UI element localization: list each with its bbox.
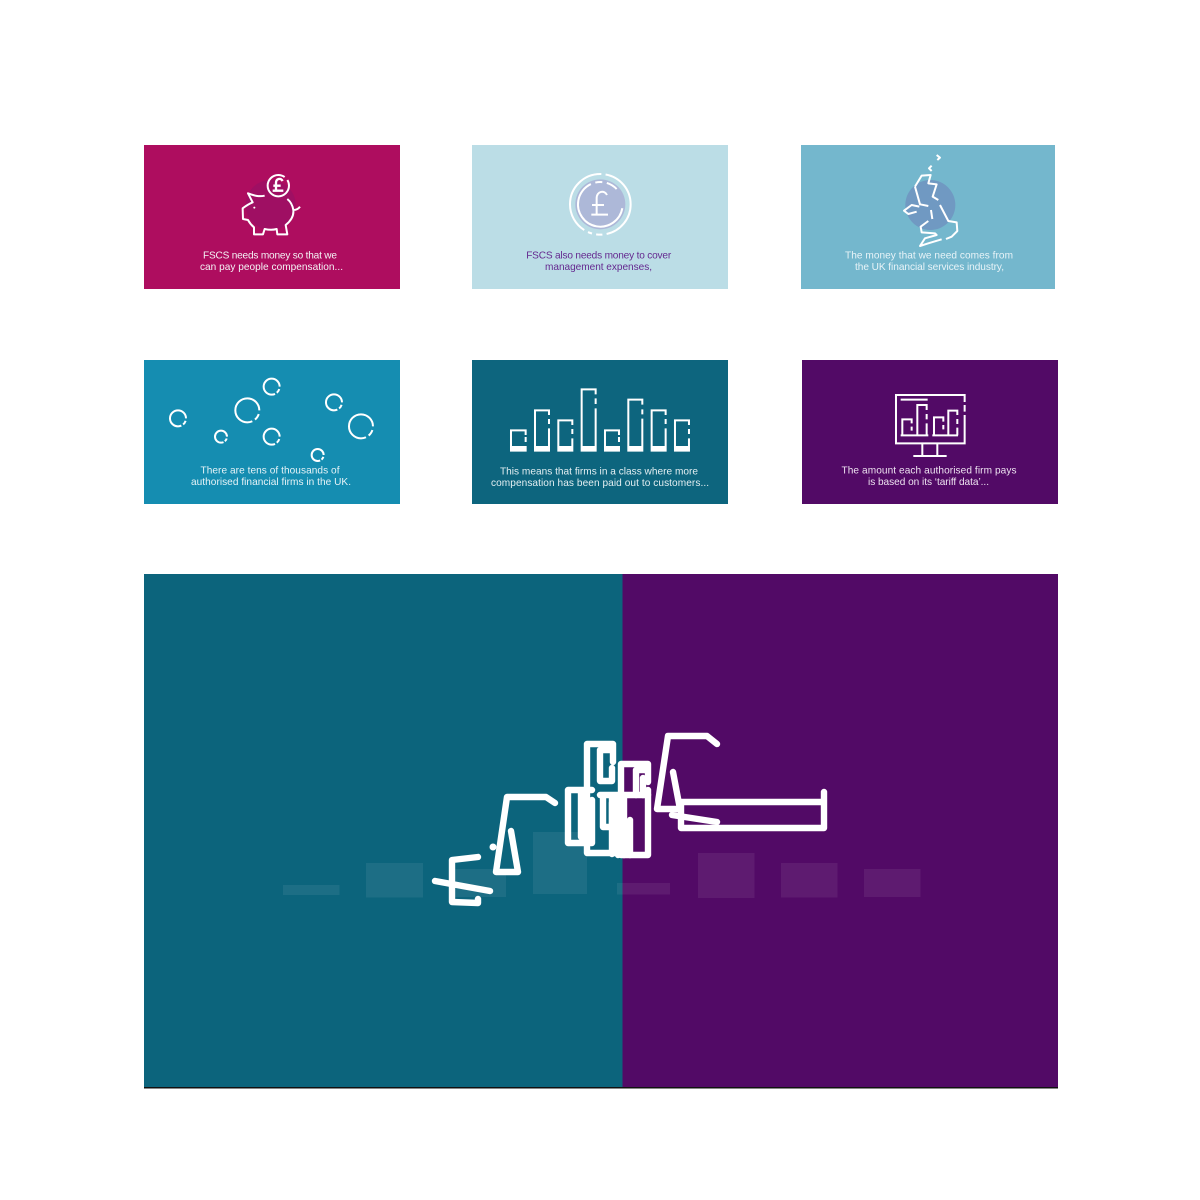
text: management expenses caption: management expenses, xyxy=(545,262,652,273)
text: authorised firms caption: There are tens of thousands of xyxy=(200,466,340,476)
panel: management expenses (coin) xyxy=(472,145,728,289)
icon: scattered firm circles xyxy=(170,379,373,461)
text: UK industry caption: the UK financial services industry, xyxy=(855,262,1004,273)
text: compensation caption: can pay people compensation... xyxy=(200,262,343,273)
icon: piggy bank with pound coin xyxy=(243,175,300,234)
text: authorised firms caption: authorised financial firms in the UK. xyxy=(191,477,351,488)
panel: compensation (piggy bank) xyxy=(144,145,400,289)
panel: tariff data (monitor) xyxy=(802,360,1058,504)
text: compensation caption: FSCS needs money so that we xyxy=(203,250,337,262)
panel: compensation classes (bar chart) xyxy=(472,360,728,504)
icon: computer monitor with chart xyxy=(896,395,965,456)
text: UK industry caption: The money that we need comes from xyxy=(845,250,1013,262)
panel: UK financial services industry (map) xyxy=(801,145,1055,289)
text: compensation classes caption: This means that firms in a class where more xyxy=(500,466,698,478)
text: tariff data caption: The amount each authorised firm pays xyxy=(842,466,1016,476)
text: compensation classes caption: compensation has been paid out to customers... xyxy=(491,478,709,489)
left teal half xyxy=(144,574,622,1087)
baseline rule xyxy=(144,1087,1058,1088)
white scribbled line art xyxy=(435,736,824,903)
panel: large split chart xyxy=(144,574,1058,1088)
icon: UK map xyxy=(904,155,957,246)
right purple half xyxy=(622,574,1058,1087)
text: tariff data caption: is based on its ‘tariff data’... xyxy=(868,477,989,488)
panel: authorised firms (circles) xyxy=(144,360,400,504)
faint bars xyxy=(283,832,920,898)
bar chart icon xyxy=(510,389,690,452)
icon: pound coin xyxy=(570,174,631,235)
text: management expenses caption: FSCS also needs money to cover xyxy=(526,250,672,262)
